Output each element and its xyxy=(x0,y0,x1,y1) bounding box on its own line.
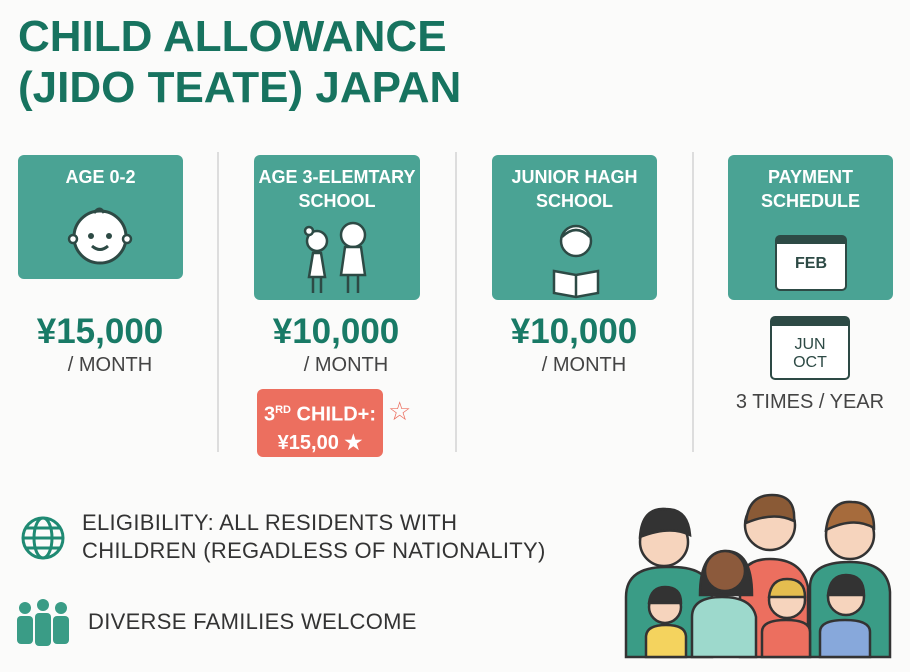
icon: calendar jun oct: OCT xyxy=(793,354,827,371)
icon: calendar feb: FEB xyxy=(795,255,827,272)
unit: / MONTH xyxy=(542,354,626,376)
title xyxy=(18,12,461,112)
unit: / MONTH xyxy=(68,354,152,376)
price: age 3-elementary: ¥10,000 xyxy=(273,312,399,351)
panel: junior high: JUNIOR HAGH xyxy=(511,167,638,187)
icon: child reading xyxy=(552,224,600,298)
icon: calendar feb xyxy=(775,235,847,291)
icon: baby face xyxy=(68,208,132,264)
text: eligibility: ELIGIBILITY: ALL RESIDENTS WITH xyxy=(82,510,457,535)
panel: payment schedule: SCHEDULE xyxy=(761,191,860,211)
panel: age 3-elementary xyxy=(254,155,420,300)
panel: junior high xyxy=(492,155,657,300)
callout: 3rd child: ¥15,00 ★ xyxy=(278,432,362,454)
icon: two girls xyxy=(304,222,366,293)
text: eligibility: CHILDREN (REGADLESS OF NATIONALITY) xyxy=(82,538,546,563)
icon: globe xyxy=(22,516,64,560)
text: diverse families: DIVERSE FAMILIES WELCOME xyxy=(88,609,417,634)
panel: age 3-elementary: AGE 3-ELEMTARY xyxy=(258,167,416,187)
text: eligibility xyxy=(82,510,546,563)
panel: age 3-elementary: SCHOOL xyxy=(298,191,376,211)
price: age 0-2: ¥15,000 xyxy=(37,312,163,351)
panel: junior high: SCHOOL xyxy=(536,191,613,211)
icon: calendar jun oct xyxy=(770,316,850,380)
icon: family group xyxy=(17,599,69,646)
panel: payment schedule: PAYMENT xyxy=(768,167,853,187)
icon: star: ☆ xyxy=(388,396,411,426)
unit: / MONTH xyxy=(304,354,388,376)
panel: payment schedule xyxy=(728,155,893,300)
panel: age 0-2 xyxy=(18,155,183,279)
callout: 3rd child xyxy=(257,389,383,457)
price: junior high: ¥10,000 xyxy=(511,312,637,351)
illustration: family xyxy=(624,494,892,658)
text: 3 times/year: 3 TIMES / YEAR xyxy=(736,391,884,413)
panel: age 0-2: AGE 0-2 xyxy=(65,167,136,187)
callout: 3rd child: 3RD CHILD+: xyxy=(264,404,376,426)
icon: calendar jun oct: JUN xyxy=(794,336,826,353)
title: CHILD ALLOWANCE xyxy=(18,12,447,61)
title: (JIDO TEATE) JAPAN xyxy=(18,63,461,112)
